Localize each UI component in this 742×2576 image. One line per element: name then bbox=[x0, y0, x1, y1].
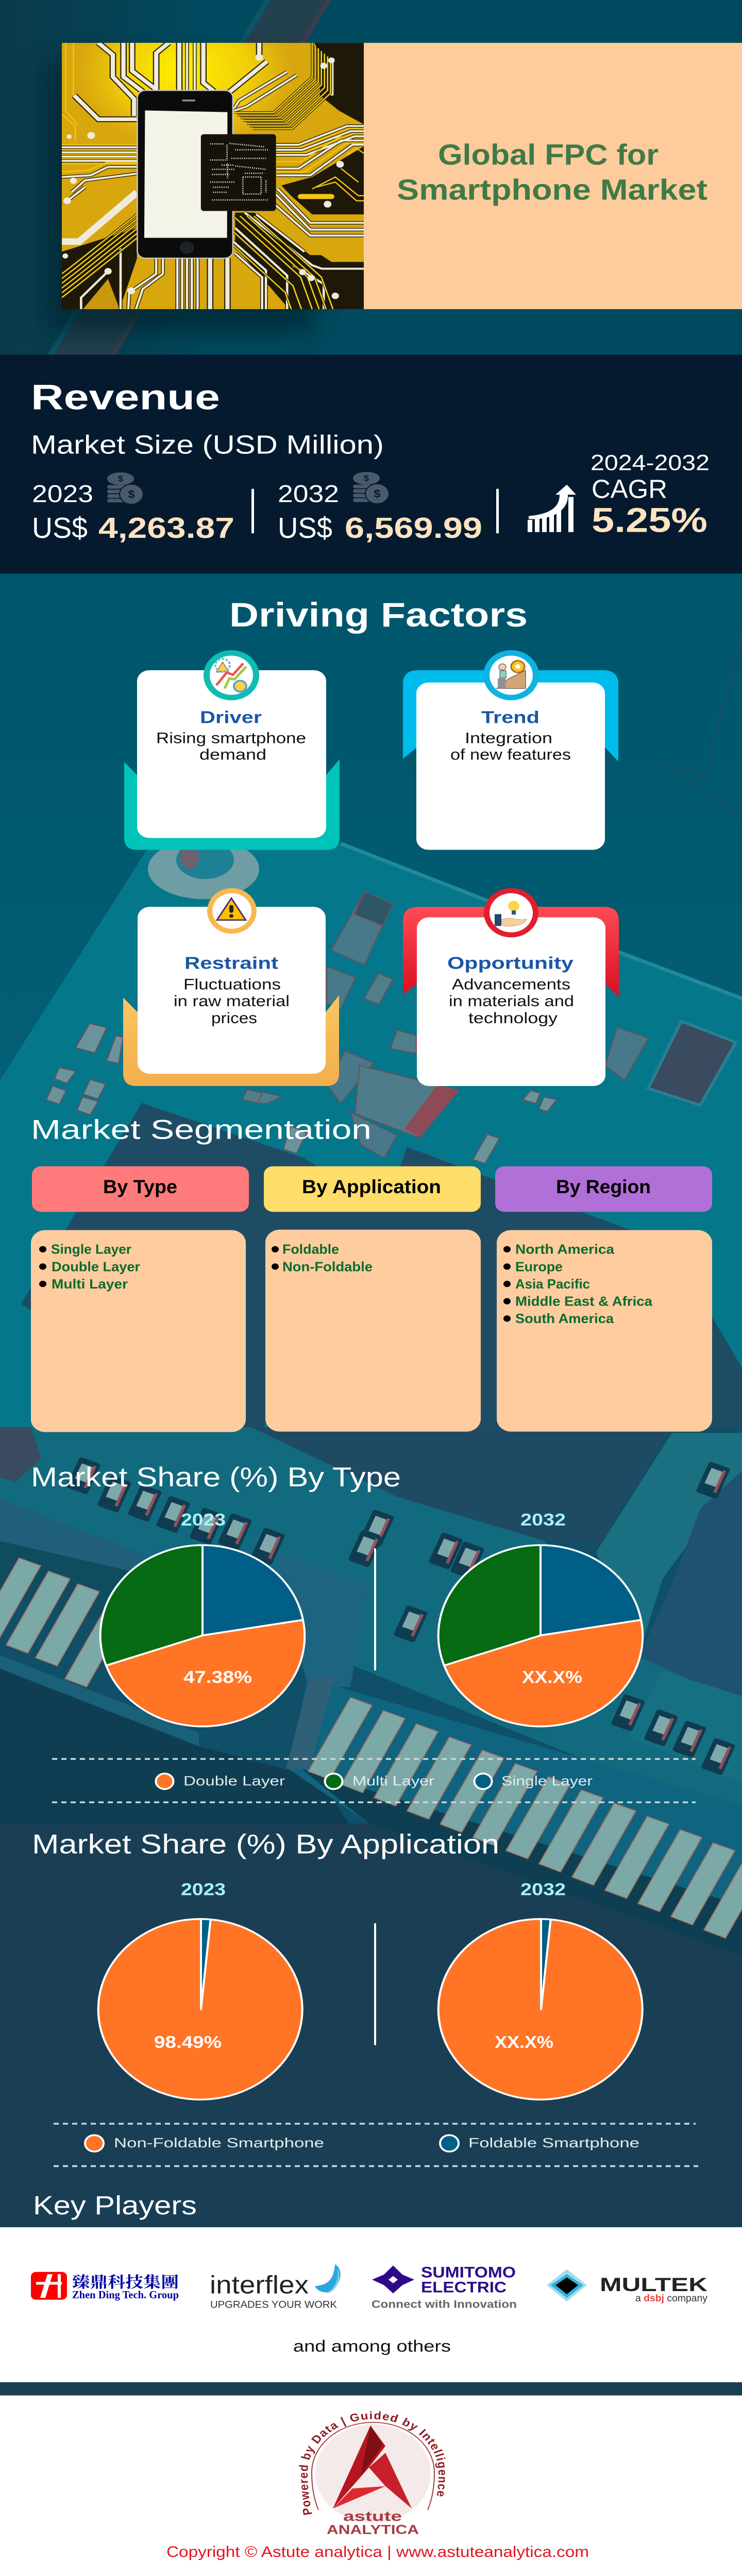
list panel: type segments: Multi Layer bbox=[52, 1276, 128, 1292]
logo: interflex: interflex bbox=[210, 2270, 309, 2299]
stat: 2023 bbox=[32, 480, 234, 544]
chart: type share 2032: 2032 bbox=[520, 1510, 566, 1530]
logo: multek bbox=[547, 2269, 708, 2304]
chart: type share 2023: 47.38% bbox=[183, 1667, 252, 1687]
logo: multek: MULTEK bbox=[600, 2274, 707, 2295]
background: dark chip bbox=[648, 1021, 736, 1105]
text: driver description bbox=[156, 730, 306, 763]
logo: astute analytica: astute bbox=[343, 2509, 402, 2524]
list panel: region segments bbox=[497, 1230, 712, 1432]
heading: opportunity: Opportunity bbox=[447, 954, 574, 973]
chart: application share 2032: XX.X% bbox=[495, 2032, 553, 2052]
chart: application share 2023 bbox=[98, 1880, 302, 2099]
stat: cagr: CAGR bbox=[592, 474, 667, 504]
background: ring bbox=[148, 839, 259, 899]
text: trend description bbox=[450, 730, 571, 763]
list panel: region segments: South America bbox=[515, 1311, 614, 1326]
panel: footer bbox=[0, 2396, 742, 2576]
heading: market share by type: Market Share (%) By Type bbox=[31, 1462, 401, 1493]
chart: application share 2032 bbox=[439, 1880, 643, 2099]
text: restraint description: in raw material bbox=[174, 993, 290, 1010]
background: small components bbox=[66, 1456, 736, 1775]
icon: driver bbox=[204, 650, 259, 700]
text: restraint description bbox=[174, 976, 290, 1026]
stat: 2032: 2032 bbox=[278, 480, 339, 507]
stat: 2032: 6,569.99 bbox=[345, 512, 482, 544]
logo: astute analytica: ANALYTICA bbox=[327, 2522, 419, 2537]
segment header: by region bbox=[495, 1166, 712, 1212]
background: lower board bands bbox=[0, 1427, 742, 2280]
logo: interflex: UPGRADES YOUR WORK bbox=[210, 2299, 337, 2310]
legend: application share: Foldable Smartphone bbox=[468, 2136, 639, 2150]
circuit traces bbox=[62, 43, 364, 325]
logo: zhen ding: Zhen Ding Tech. Group bbox=[72, 2289, 179, 2301]
segment header: by region: By Region bbox=[556, 1176, 651, 1197]
text: driver description: demand bbox=[199, 746, 266, 763]
icon: growth arrow bbox=[528, 485, 576, 532]
list panel: type segments: Single Layer bbox=[51, 1242, 131, 1257]
heading: driving factors: Driving Factors bbox=[229, 596, 528, 634]
panel: driver card bbox=[124, 650, 340, 850]
list panel: application segments bbox=[265, 1230, 481, 1432]
heading: revenue: Revenue bbox=[31, 377, 220, 417]
logo: sumitomo electric: Connect with Innovation bbox=[372, 2298, 517, 2310]
list panel: application segments: Non-Foldable bbox=[282, 1259, 373, 1274]
stat: cagr: 5.25% bbox=[592, 501, 707, 540]
segment header: by type bbox=[32, 1166, 249, 1212]
icon: restraint bbox=[207, 888, 257, 934]
stat: 2023: US$ bbox=[32, 512, 88, 544]
icon: opportunity bbox=[484, 888, 538, 937]
stat: 2032 bbox=[278, 480, 482, 544]
legend: type share bbox=[156, 1773, 593, 1789]
panel: trend card bbox=[403, 650, 618, 850]
stat: 2023: 2023 bbox=[32, 480, 93, 507]
text: trend description: Integration bbox=[465, 730, 552, 747]
list panel: type segments bbox=[31, 1230, 246, 1432]
heading: market share by application: Market Share (%) By Application bbox=[32, 1829, 499, 1860]
chart: type share 2023 bbox=[100, 1510, 305, 1726]
text: opportunity description: technology bbox=[468, 1010, 558, 1026]
icon: coins 2032: $ bbox=[364, 474, 369, 483]
text: restraint description: prices bbox=[211, 1010, 257, 1026]
chart: type share 2023: 2023 bbox=[181, 1510, 226, 1530]
heading: key players: Key Players bbox=[33, 2190, 197, 2220]
icon: coins 2023: $ bbox=[128, 488, 135, 500]
title: Global FPC for bbox=[438, 138, 659, 171]
divider bbox=[374, 1548, 376, 1670]
divider bbox=[496, 489, 499, 533]
hero image: phone on circuit board bbox=[62, 43, 364, 309]
list panel: region segments: Europe bbox=[515, 1259, 563, 1274]
background: inductors and chips bbox=[46, 892, 648, 1163]
stat: cagr bbox=[591, 450, 710, 540]
heading: restraint: Restraint bbox=[184, 954, 278, 973]
logo: multek: a dsbj company bbox=[635, 2293, 708, 2304]
stat: 2032: US$ bbox=[278, 512, 332, 544]
heading: driver: Driver bbox=[200, 708, 262, 727]
legend: type share: Multi Layer bbox=[352, 1773, 434, 1788]
logo: interflex bbox=[210, 2264, 341, 2310]
text: opportunity description: Advancements bbox=[452, 976, 570, 993]
list panel: region segments: Middle East & Africa bbox=[515, 1294, 653, 1309]
panel: opportunity card bbox=[403, 888, 619, 1086]
legend: type share: Double Layer bbox=[183, 1773, 285, 1788]
logo: zhen ding bbox=[31, 2270, 179, 2301]
legend: application share bbox=[85, 2135, 639, 2151]
icon: coins 2023: $ bbox=[118, 474, 124, 483]
text: copyright: Copyright © Astute analytica | www.astuteanalytica.com bbox=[166, 2544, 589, 2560]
logo: zhen ding: 臻鼎科技集團 bbox=[72, 2270, 179, 2292]
segment header: by application: By Application bbox=[302, 1176, 441, 1197]
logo: sumitomo electric: SUMITOMO bbox=[421, 2263, 516, 2281]
panel: revenue bbox=[0, 354, 742, 573]
text: and among others: and among others bbox=[293, 2337, 451, 2355]
segment header: by application bbox=[264, 1166, 481, 1212]
legend: application share: Non-Foldable Smartphone bbox=[114, 2136, 324, 2150]
icon: coins 2032: $ bbox=[374, 487, 381, 500]
list panel: application segments: Foldable bbox=[282, 1242, 339, 1257]
stat: 2023: 4,263.87 bbox=[98, 512, 234, 544]
icon: coins 2032 bbox=[353, 472, 389, 504]
text: driver description: Rising smartphone bbox=[156, 730, 306, 747]
chart: application share 2023: 2023 bbox=[181, 1880, 226, 1899]
icon: coins 2023 bbox=[107, 472, 143, 504]
hero shadow bbox=[46, 59, 314, 333]
legend: type share: Single Layer bbox=[501, 1773, 593, 1788]
chart: type share 2032: XX.X% bbox=[522, 1667, 582, 1687]
circuit card on phone bbox=[201, 134, 276, 211]
segment header: by type: By Type bbox=[103, 1176, 177, 1197]
logo: sumitomo electric bbox=[372, 2263, 517, 2310]
stat: cagr: 2024-2032 bbox=[591, 450, 710, 475]
logo: astute analytica: Powered by Data | Guided by Intelligence bbox=[299, 2411, 446, 2515]
chart: application share 2023: 98.49% bbox=[154, 2032, 222, 2052]
text: opportunity description bbox=[449, 976, 574, 1026]
icon: trend bbox=[483, 650, 539, 700]
text: restraint description: Fluctuations bbox=[183, 976, 281, 993]
title panel bbox=[364, 43, 742, 309]
logo: sumitomo electric: ELECTRIC bbox=[421, 2278, 507, 2296]
title bbox=[397, 138, 707, 206]
panel: key players bbox=[0, 2227, 742, 2382]
panel: restraint card bbox=[123, 888, 339, 1086]
divider bbox=[374, 1923, 376, 2045]
title: Smartphone Market bbox=[397, 173, 707, 206]
phone bbox=[137, 90, 233, 258]
list panel: region segments: Asia Pacific bbox=[515, 1276, 590, 1292]
list panel: region segments: North America bbox=[515, 1242, 615, 1257]
background: memory slats bbox=[0, 1558, 742, 1938]
list panel: type segments: Double Layer bbox=[52, 1259, 140, 1274]
divider bbox=[251, 489, 254, 533]
chart: application share 2032: 2032 bbox=[520, 1880, 566, 1899]
heading: trend: Trend bbox=[481, 708, 539, 727]
chart: type share 2032 bbox=[439, 1510, 643, 1726]
text: trend description: of new features bbox=[450, 746, 571, 763]
text: opportunity description: in materials and bbox=[449, 993, 574, 1010]
heading: market segmentation: Market Segmentation bbox=[31, 1115, 372, 1145]
subheading: market size: Market Size (USD Million) bbox=[31, 430, 384, 460]
